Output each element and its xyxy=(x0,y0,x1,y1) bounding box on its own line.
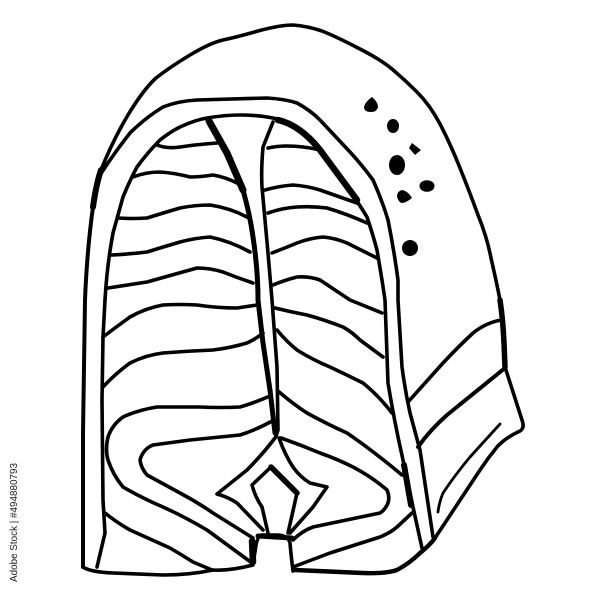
outer arch of the inner band xyxy=(102,98,433,537)
central spine xyxy=(209,121,278,436)
stock image credit: Adobe Stock | #494880793 xyxy=(9,463,20,582)
inner arch around the flesh xyxy=(97,115,422,567)
inner diamond xyxy=(252,467,271,533)
outer outline of the steak xyxy=(83,25,523,575)
dark skin spots xyxy=(364,97,434,256)
left flesh ribs xyxy=(103,143,274,570)
right flesh ribs xyxy=(265,146,412,567)
centre diamond tail bone xyxy=(217,438,327,538)
right fin bands xyxy=(408,320,505,512)
